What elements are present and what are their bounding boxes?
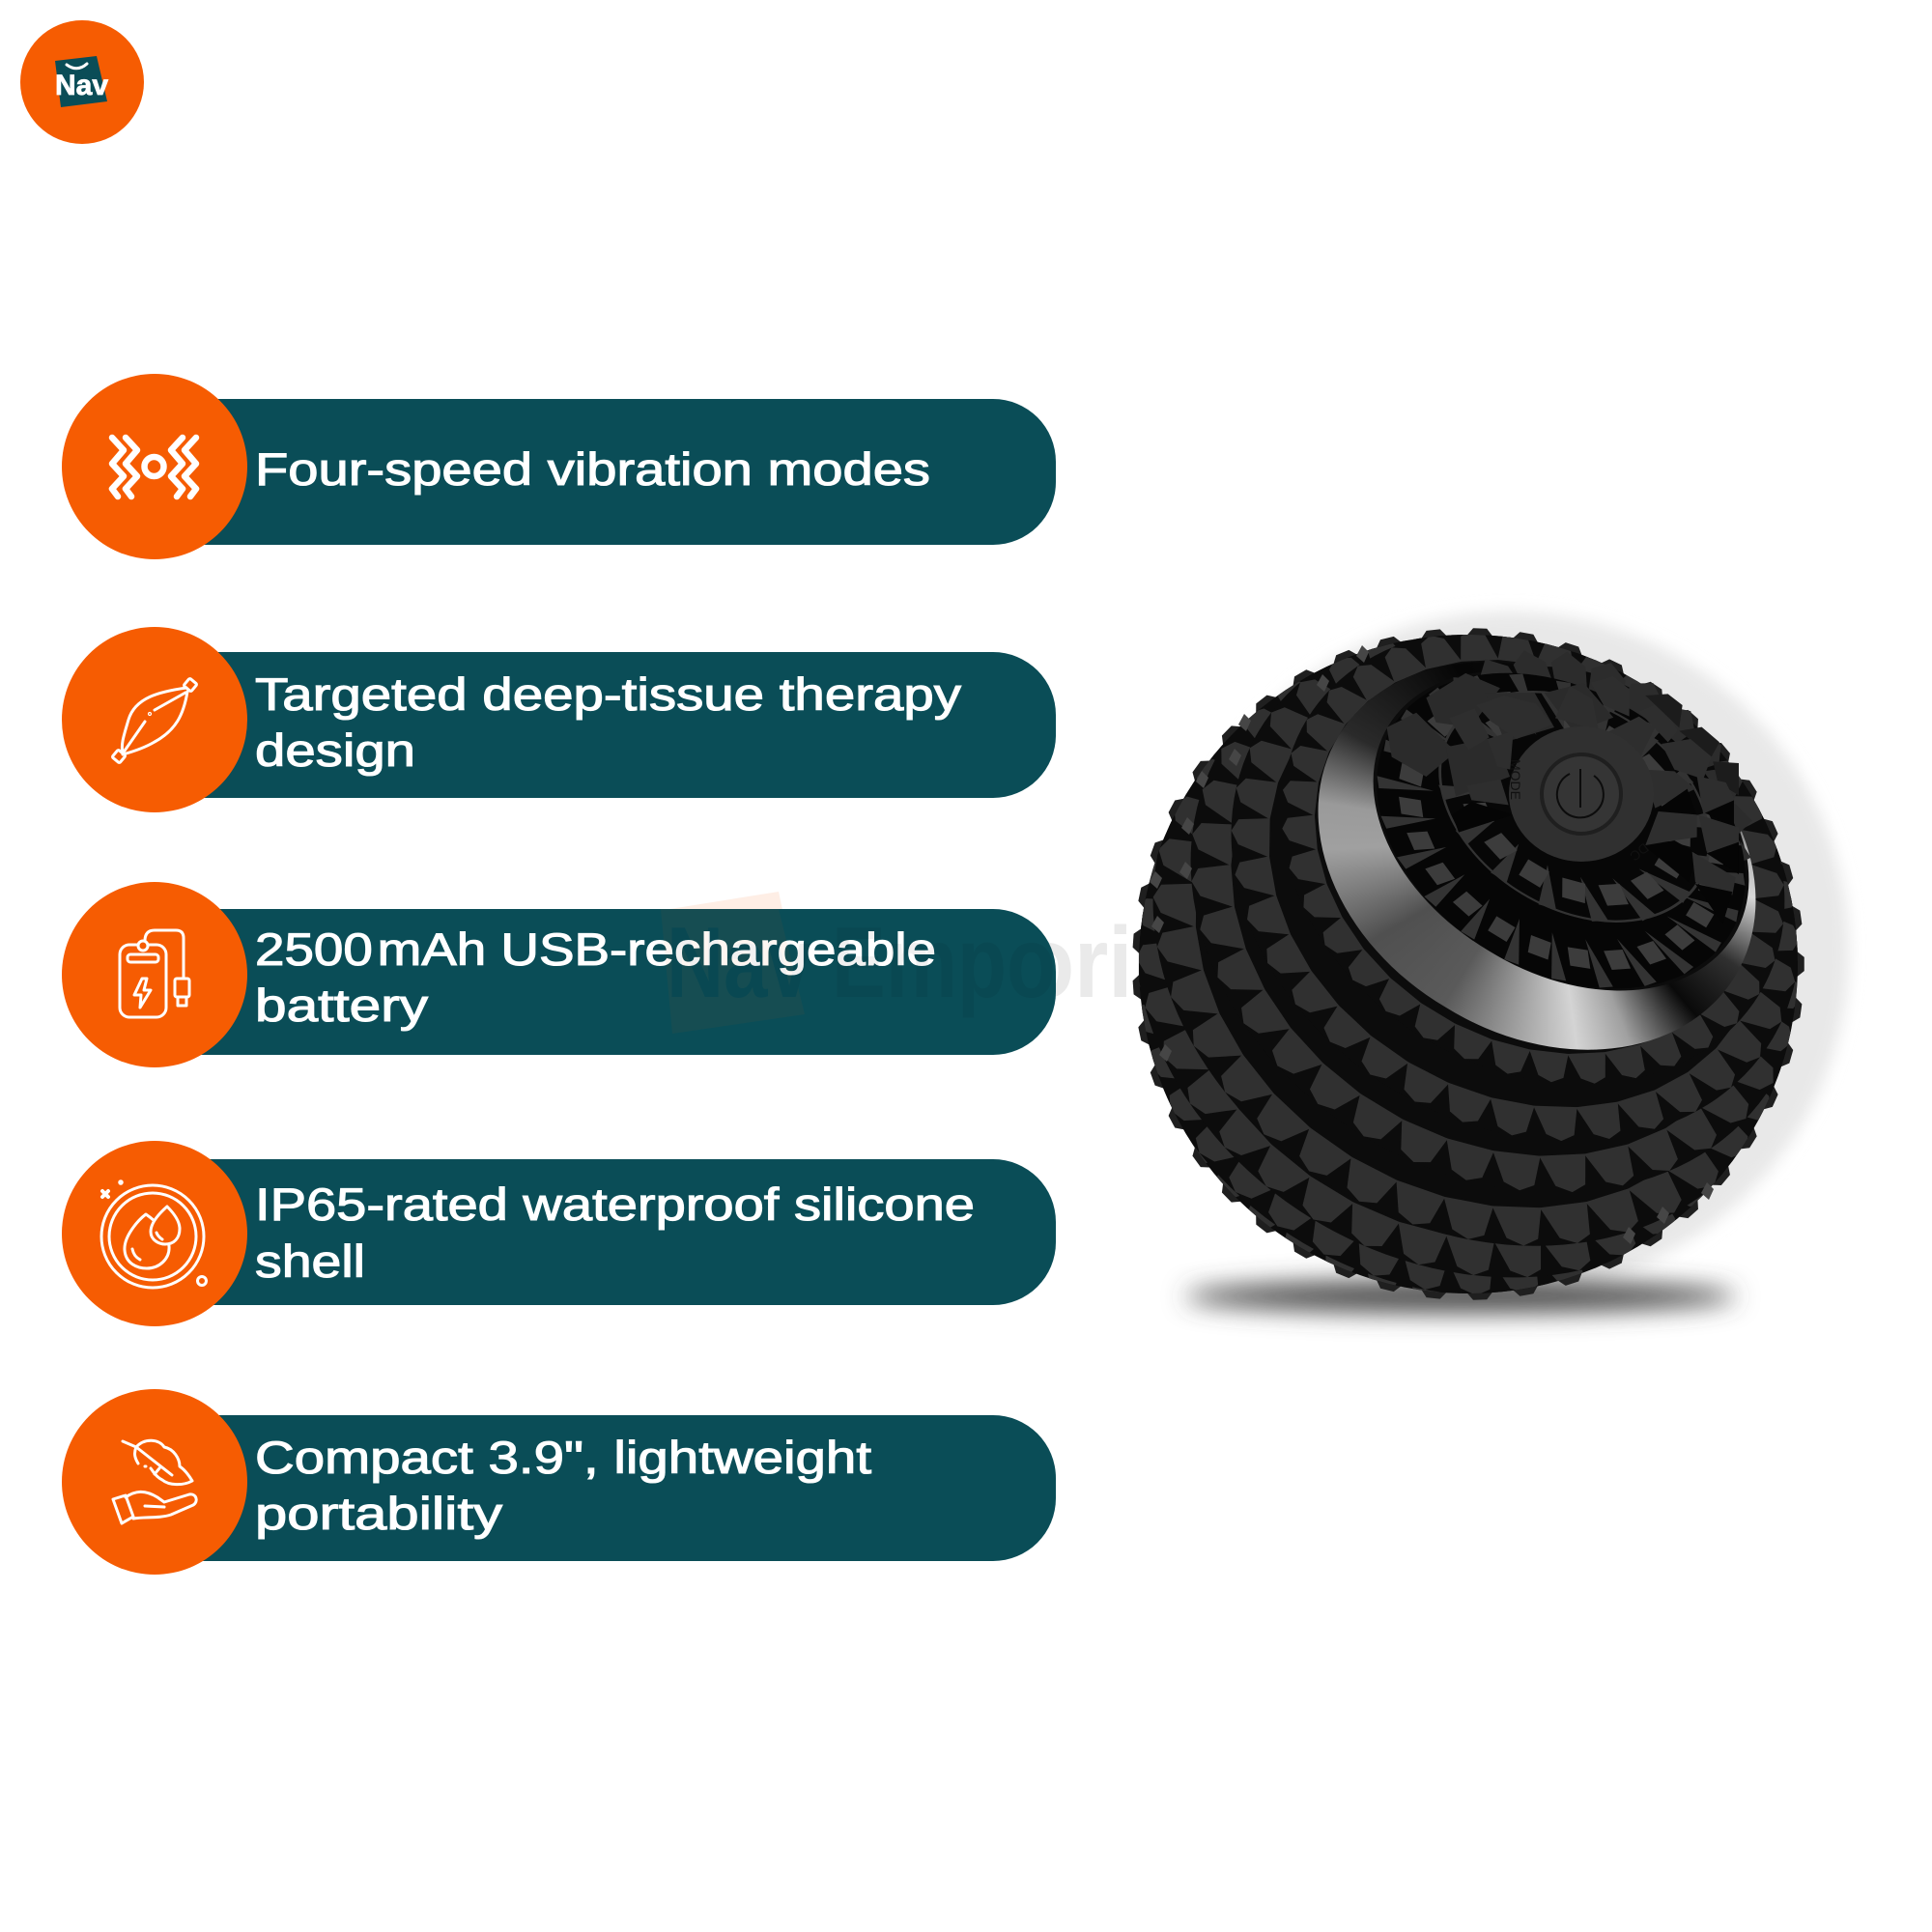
icon circle 5 bbox=[62, 1389, 247, 1575]
inner stud row 1 bbox=[1255, 552, 1867, 1110]
icon circle 1 bbox=[62, 374, 247, 559]
limb diamonds bbox=[1150, 645, 1714, 1244]
icon: feather over hand bbox=[113, 1440, 196, 1523]
panel: feature 4: shell bbox=[255, 1236, 365, 1287]
power icon bbox=[1557, 769, 1604, 817]
panel: feature 2: design bbox=[255, 724, 415, 776]
pill 5 bbox=[155, 1415, 1056, 1561]
watermark over pill 3: Empo bbox=[832, 907, 1056, 1019]
pill 1 bbox=[155, 399, 1056, 545]
product image: massage ball bbox=[1132, 609, 1851, 1333]
icon: water drops bbox=[101, 1180, 207, 1288]
watermark: Nav Emporium on white: Nav bbox=[667, 907, 811, 1019]
ground shadow bbox=[1185, 1280, 1736, 1313]
logo badge bbox=[20, 20, 144, 144]
watermark: Nav Emporium on white bbox=[658, 892, 1264, 1034]
watermark over pill 3 bbox=[661, 907, 1056, 1034]
panel: feature 3 bbox=[62, 882, 1056, 1067]
control disc bbox=[1508, 726, 1654, 865]
top rim studs bbox=[1306, 542, 1862, 1052]
panel: feature 2 bbox=[62, 627, 1056, 812]
icon circle 2 bbox=[62, 627, 247, 812]
watermark: Nav Emporium on white: Emporium bbox=[832, 907, 1264, 1019]
metallic ring bbox=[1318, 678, 1756, 1050]
text 3: 2500 mAh USB-rechargeable bbox=[255, 923, 936, 975]
ball body and rows bbox=[1132, 628, 1804, 1300]
ghost halo bbox=[1169, 611, 1849, 1292]
watermark over pill 3: Nav bbox=[667, 907, 811, 1019]
pill 3 bbox=[155, 909, 1056, 1055]
MODE label: MODE bbox=[1508, 759, 1523, 800]
text 1: Four-speed vibration modes bbox=[255, 443, 930, 495]
panel: feature 4 bbox=[62, 1141, 1056, 1326]
panel: feature 5 bbox=[62, 1389, 1056, 1575]
DC label: DC bbox=[1627, 840, 1652, 865]
pill 2 bbox=[155, 652, 1056, 798]
icon: vibration bbox=[112, 438, 196, 497]
upper-right inner studs bbox=[1449, 676, 1739, 924]
panel: feature 5: portability bbox=[255, 1488, 503, 1539]
icon circle 4 bbox=[62, 1141, 247, 1326]
panel: feature 3: battery bbox=[255, 980, 429, 1031]
logo badge: Nav bbox=[55, 70, 108, 101]
pill 4 bbox=[155, 1159, 1056, 1305]
limb bumps bbox=[1015, 517, 1865, 1379]
studded rings bbox=[1139, 635, 1798, 1293]
icon: power bank bbox=[120, 930, 189, 1017]
icon: muscle bbox=[112, 678, 197, 763]
text 4: IP65-rated waterproof silicone bbox=[255, 1179, 975, 1230]
text 2: Targeted deep-tissue therapy bbox=[255, 668, 962, 720]
icon circle 3 bbox=[62, 882, 247, 1067]
inner stud row 2 bbox=[1375, 623, 1775, 990]
text 5: Compact 3.9", lightweight bbox=[255, 1432, 871, 1483]
upper-left inner studs bbox=[1387, 673, 1613, 796]
panel: feature 1 bbox=[62, 374, 1056, 559]
